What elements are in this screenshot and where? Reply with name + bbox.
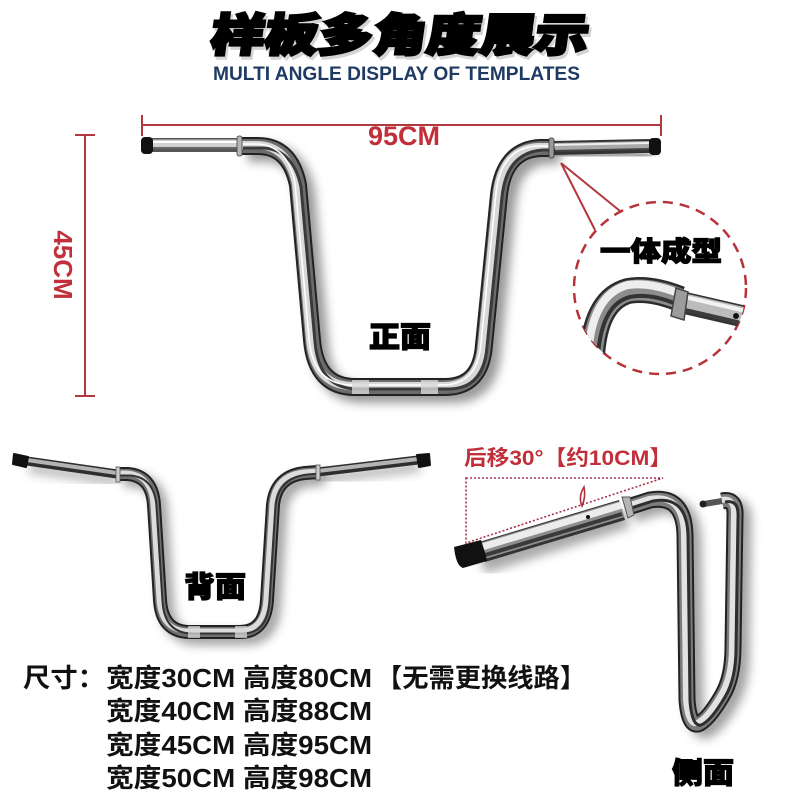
height label: 45CM — [48, 230, 78, 300]
width label: 95CM — [368, 121, 440, 151]
callout lines — [561, 163, 620, 230]
size specification: 尺寸： — [23, 663, 105, 693]
angle label: 后移30°【约10CM】 — [464, 447, 672, 470]
size specification: 宽度50CM 高度98CM — [106, 763, 372, 793]
back: right grip cap — [417, 454, 430, 467]
side: far end — [700, 500, 706, 508]
back view label: 背面 — [184, 564, 246, 606]
front view label: 正面 — [369, 314, 431, 356]
callout: one-piece detail — [574, 202, 750, 374]
side: collar — [622, 497, 634, 518]
front: right grip cap — [649, 138, 661, 155]
subtitle: MULTI ANGLE DISPLAY OF TEMPLATES — [213, 64, 580, 85]
back: collars — [116, 465, 320, 482]
height dimension line — [75, 135, 95, 396]
front: left grip cap — [141, 137, 153, 154]
back: left grip cap — [13, 454, 28, 467]
side view label: 侧面 — [672, 750, 734, 792]
handlebar: back view — [13, 454, 430, 638]
size specification: 宽度45CM 高度95CM — [106, 730, 372, 760]
side: far end stub — [704, 501, 722, 504]
size specification — [23, 663, 586, 793]
handlebar: front view — [141, 136, 661, 394]
size specification: 宽度40CM 高度88CM — [106, 696, 372, 726]
front: right collar — [549, 138, 554, 158]
front: left collar — [237, 136, 242, 156]
callout label: 一体成型 — [600, 230, 722, 269]
width dimension line — [142, 115, 661, 136]
detail: chrome bar — [588, 284, 750, 355]
back: engraved marks — [188, 626, 247, 638]
title: 样板多角度展示 — [207, 0, 594, 65]
handlebar: side view — [454, 497, 743, 730]
side: main tube — [482, 510, 622, 552]
front: engraved marks — [352, 380, 438, 394]
side: grip cap — [454, 540, 487, 568]
size specification: 【无需更换线路】 — [376, 663, 586, 693]
size specification: 宽度30CM 高度80CM — [106, 663, 372, 693]
angle guide — [466, 478, 663, 543]
title: 样板多角度展示 — [209, 3, 596, 68]
